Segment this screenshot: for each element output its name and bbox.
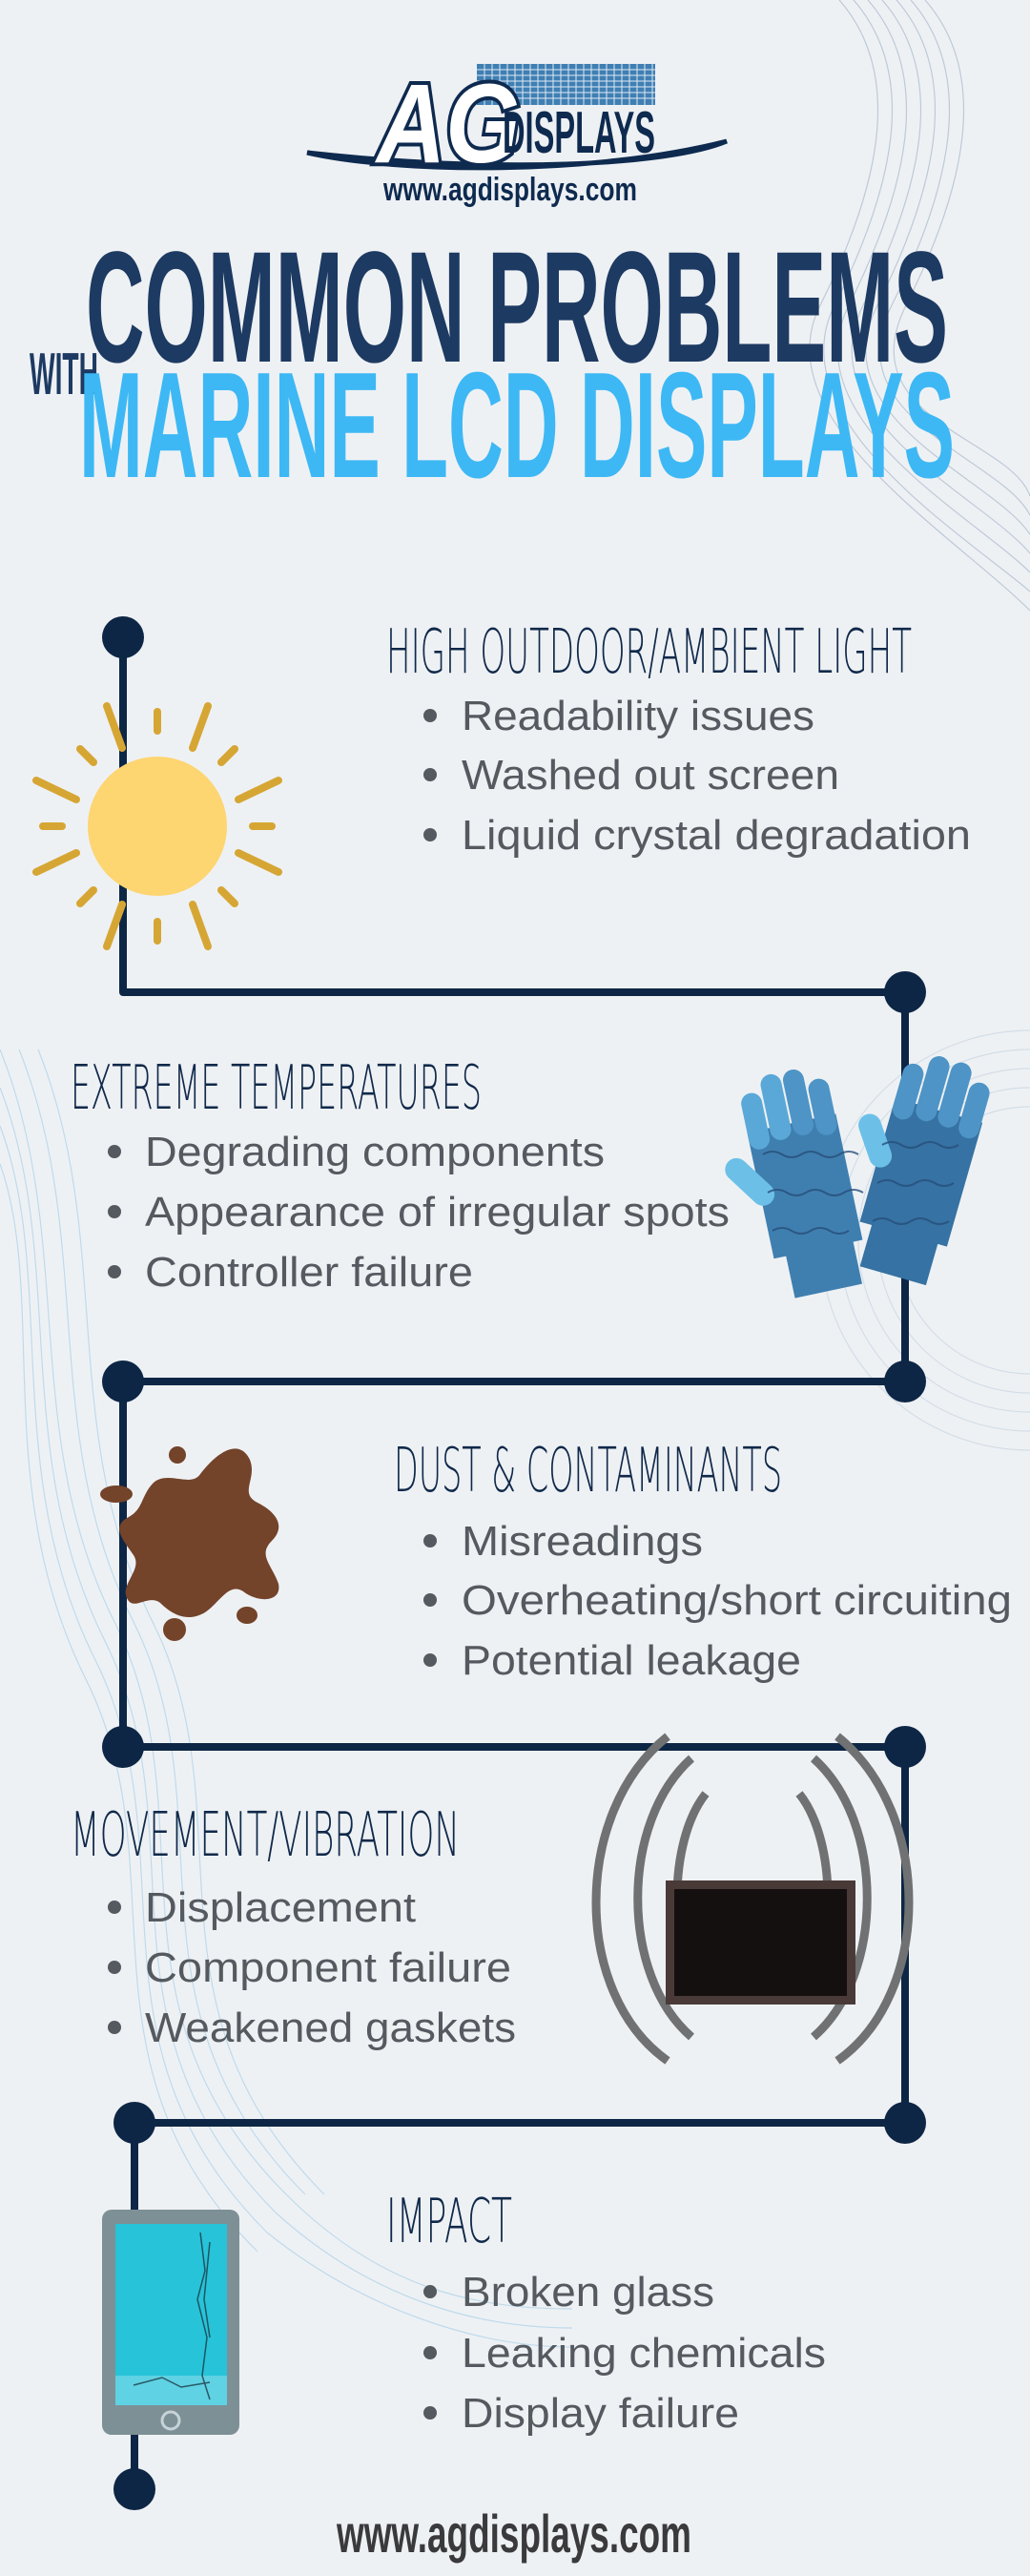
icon: sun xyxy=(36,706,278,946)
logo: www.agdisplays.com xyxy=(382,172,637,208)
panel: high outdoor light: Readability issues xyxy=(462,693,814,739)
title: WITH xyxy=(30,342,98,407)
icon: mud splat xyxy=(100,1446,278,1641)
panel: extreme temperatures: EXTREME TEMPERATURES xyxy=(71,1053,482,1124)
logo: AG xyxy=(374,61,520,187)
footer url: www.agdisplays.com xyxy=(336,2503,691,2564)
panel: impact: Leaking chemicals xyxy=(462,2330,826,2377)
panel: extreme temperatures: Degrading components xyxy=(145,1129,605,1175)
panel: movement/vibration: MOVEMENT/VIBRATION xyxy=(71,1800,460,1871)
panel: extreme temperatures: Controller failure xyxy=(145,1249,473,1296)
icon: cracked phone xyxy=(102,2210,239,2435)
panel: movement/vibration: Component failure xyxy=(145,1944,511,1991)
icon: gloves xyxy=(703,1038,997,1308)
panel: dust & contaminants xyxy=(394,1436,1012,1684)
panel: movement/vibration: Displacement xyxy=(145,1884,416,1931)
panel: high outdoor light: Liquid crystal degradation xyxy=(462,812,971,859)
panel: impact: Broken glass xyxy=(462,2269,714,2316)
panel: extreme temperatures: Appearance of irregular spots xyxy=(145,1189,730,1236)
panel: dust & contaminants: Misreadings xyxy=(462,1518,703,1565)
panel: impact xyxy=(386,2187,826,2437)
panel: dust & contaminants: Potential leakage xyxy=(462,1637,801,1684)
panel: dust & contaminants: Overheating/short circuiting xyxy=(462,1577,1012,1624)
panel: impact: Display failure xyxy=(462,2390,739,2437)
timeline connector xyxy=(102,616,926,2510)
logo: DISPLAYS xyxy=(503,100,655,166)
panel: high outdoor light xyxy=(386,617,971,859)
panel: high outdoor light: Washed out screen xyxy=(462,752,839,799)
panel: extreme temperatures xyxy=(71,1053,730,1296)
logo xyxy=(307,61,727,208)
title xyxy=(30,219,955,509)
panel: movement/vibration: Weakened gaskets xyxy=(145,2005,516,2051)
panel: impact: IMPACT xyxy=(386,2187,512,2257)
panel: movement/vibration xyxy=(71,1800,516,2051)
icon: vibrating display xyxy=(596,1736,909,2061)
